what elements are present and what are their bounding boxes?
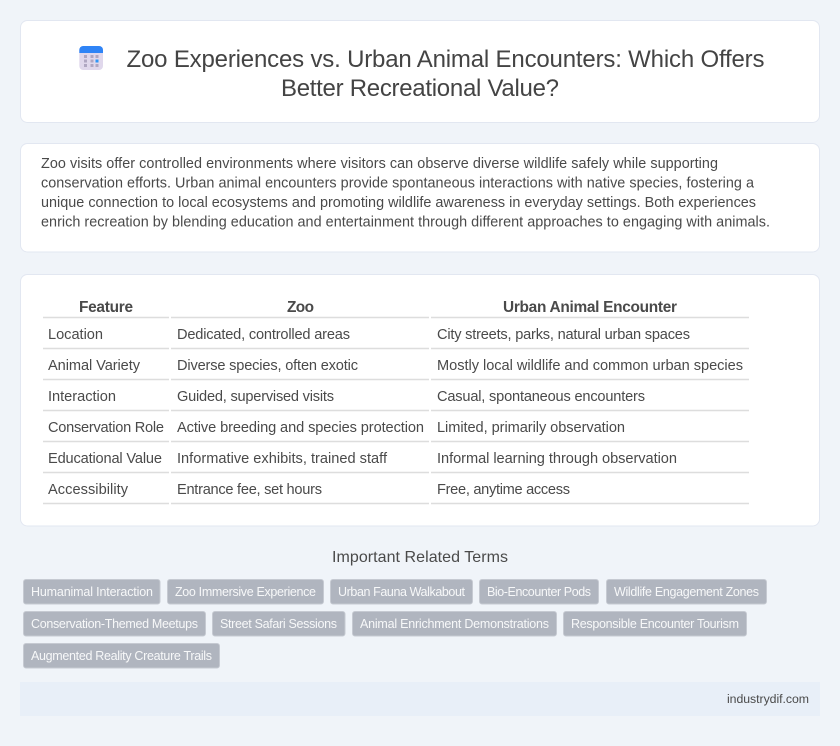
tag list: related terms	[24, 580, 766, 668]
footer source text: industrydif.com	[727, 692, 809, 706]
title: Better Recreational Value?	[281, 75, 559, 102]
tag list: related terms: Wildlife Engagement Zones	[614, 585, 759, 599]
row: accessibility	[48, 482, 570, 498]
tag list: related terms: Bio-Encounter Pods	[487, 585, 591, 599]
panel: header card	[20, 20, 820, 122]
tag list: related terms: Augmented Reality Creature Trails	[31, 649, 212, 663]
row: educational value: Informative exhibits, trained staff	[177, 451, 388, 467]
row: location: Dedicated, controlled areas	[177, 327, 350, 343]
panel: comparison table	[20, 274, 820, 526]
table header: Feature	[79, 299, 133, 316]
tag list: related terms: Urban Fauna Walkabout	[338, 585, 466, 599]
row: conservation role: Limited, primarily observation	[437, 420, 625, 436]
row: animal variety: Diverse species, often exotic	[177, 358, 358, 374]
title	[126, 46, 764, 102]
row: animal variety: Mostly local wildlife and common urban species	[437, 358, 743, 374]
row: educational value: Informal learning through observation	[437, 451, 677, 467]
row: location	[48, 327, 690, 343]
table header	[79, 299, 677, 316]
tag list: related terms: Humanimal Interaction	[31, 585, 153, 599]
heading: related terms: Important Related Terms	[332, 549, 508, 566]
row: interaction: Casual, spontaneous encounters	[437, 389, 645, 405]
row: interaction: Guided, supervised visits	[177, 389, 334, 405]
panel: introduction	[20, 144, 820, 252]
row: animal variety	[48, 358, 743, 374]
row: accessibility: Accessibility	[48, 482, 129, 498]
table header: Urban Animal Encounter	[503, 299, 677, 316]
tag list: related terms: Responsible Encounter Tourism	[571, 617, 739, 631]
title: Zoo Experiences vs. Urban Animal Encounters: Which Offers	[126, 46, 764, 73]
footer bar	[20, 682, 820, 716]
text block: introduction paragraph: unique connection to local ecosystems and promoting wildlife awareness in everyday settings. Both experiences	[41, 195, 756, 211]
row: educational value	[48, 451, 677, 467]
tag list: related terms: Street Safari Sessions	[220, 617, 337, 631]
icon: calendar	[79, 46, 103, 70]
tag list: related terms: Conservation-Themed Meetups	[31, 617, 198, 631]
tag list: related terms: Animal Enrichment Demonstrations	[360, 617, 549, 631]
text block: introduction paragraph: Zoo visits offer controlled environments where visitors can observe diverse wildlife safely while supporting	[41, 156, 718, 172]
table header: Zoo	[287, 299, 314, 316]
row: accessibility: Entrance fee, set hours	[177, 482, 322, 498]
row: location: Location	[48, 327, 103, 343]
text block: introduction paragraph: conservation efforts. Urban animal encounters provide spontaneous interactions with native species, fostering a	[41, 176, 754, 192]
row: animal variety: Animal Variety	[48, 358, 141, 374]
row: interaction: Interaction	[48, 389, 116, 405]
row: accessibility: Free, anytime access	[437, 482, 570, 498]
row: conservation role: Active breeding and species protection	[177, 420, 424, 436]
row: educational value: Educational Value	[48, 451, 162, 467]
row: conservation role: Conservation Role	[48, 420, 164, 436]
row: conservation role	[48, 420, 625, 436]
row: interaction	[48, 389, 645, 405]
tag list: related terms: Zoo Immersive Experience	[175, 585, 316, 599]
text block: introduction paragraph: enrich recreation by blending education and entertainment through different approaches to engaging with animals.	[41, 214, 770, 230]
text block: introduction paragraph	[41, 156, 770, 230]
row: location: City streets, parks, natural urban spaces	[437, 327, 690, 343]
